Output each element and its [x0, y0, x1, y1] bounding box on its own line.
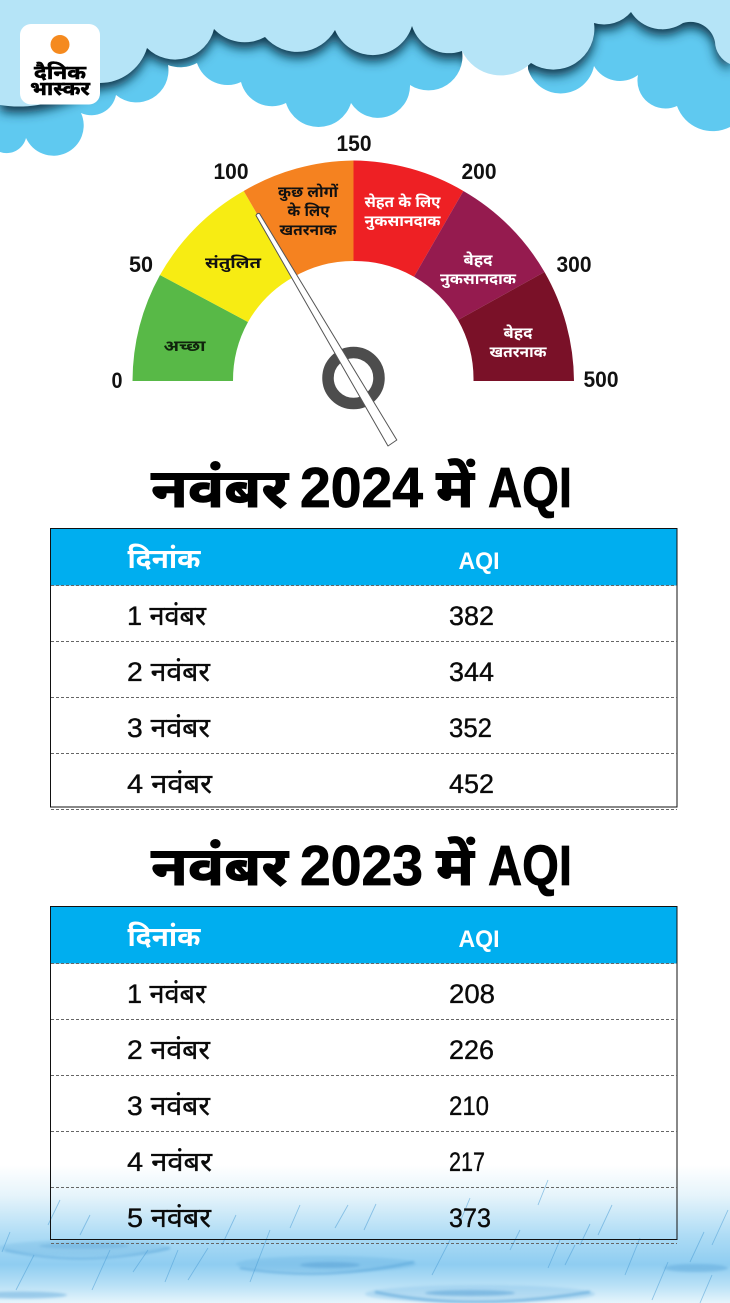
segment labels: के लिए [288, 202, 330, 220]
scale numbers: 100 [214, 159, 248, 184]
segment: orange [244, 160, 354, 277]
segment labels: खतरनाक [490, 344, 547, 361]
table header: दिनांक [128, 544, 201, 574]
scale numbers [112, 131, 618, 393]
table: November 2024 [50, 528, 677, 810]
scale numbers: 300 [556, 252, 592, 277]
row 2: 344 [449, 657, 494, 687]
row 4: 4 नवंबर [127, 1147, 213, 1177]
row 1 [127, 601, 494, 631]
heading: November 2023: 2023 [300, 834, 423, 898]
heading: November 2023 [151, 834, 572, 898]
table header: AQI [458, 548, 500, 575]
row 4: 217 [449, 1147, 485, 1177]
segment labels: अच्छा [164, 338, 206, 355]
segment labels: बेहद [464, 251, 493, 269]
segment: purple [414, 191, 544, 320]
heading: November 2023: नवंबर [151, 837, 289, 897]
logo: Dainik Bhaskar: दैनिक [34, 61, 87, 84]
cloud inner shadow [0, 6, 730, 113]
scale numbers: 200 [462, 159, 496, 184]
scale numbers: 500 [584, 367, 618, 392]
gauge chart [112, 131, 618, 446]
row 2: 2 नवंबर [127, 1035, 211, 1065]
segment labels: नुकसानदाक [440, 271, 517, 289]
background: bottom rain water gradient [0, 1165, 730, 1303]
scale numbers: 0 [112, 368, 122, 393]
clouds header [0, 0, 730, 156]
row 4 [127, 1147, 485, 1177]
row 1: 1 नवंबर [127, 601, 207, 631]
row 3: 210 [449, 1091, 489, 1121]
table header: AQI [458, 926, 500, 953]
row 4: 4 नवंबर [127, 769, 213, 799]
row 5 [127, 1203, 491, 1233]
heading: November 2024: AQI [488, 456, 572, 520]
row 4: 452 [449, 769, 494, 799]
segment labels: खतरनाक [280, 222, 337, 239]
row 3: 352 [449, 713, 492, 743]
table header [128, 922, 500, 953]
segment: maroon [458, 272, 574, 381]
row 1: 1 नवंबर [127, 979, 207, 1009]
heading: November 2024: 2024 [300, 456, 423, 520]
heading: November 2023: AQI [488, 834, 572, 898]
row 5: 373 [449, 1203, 491, 1233]
segment: green [132, 275, 248, 381]
segment labels: कुछ लोगों [278, 183, 339, 202]
hub ring [328, 352, 379, 404]
row 3 [127, 1091, 489, 1121]
row 2 [127, 1035, 494, 1065]
segment labels: नुकसानदाक [364, 213, 441, 231]
table: November 2023 [50, 906, 677, 1244]
row 2: 226 [449, 1035, 494, 1065]
needle [256, 213, 397, 446]
row 4 [127, 769, 494, 799]
scale numbers: 50 [129, 252, 153, 277]
segment: red [354, 160, 463, 277]
table header [51, 529, 676, 586]
segment labels: संतुलित [205, 255, 262, 273]
segment: yellow [160, 191, 294, 322]
heading: November 2024: नवंबर [151, 459, 289, 519]
row 1: 208 [449, 979, 495, 1009]
water ripples and rain [0, 1180, 728, 1303]
segment labels: बेहद [504, 324, 533, 342]
row 2 [127, 657, 494, 687]
logo: Dainik Bhaskar [20, 24, 100, 104]
heading: November 2024 [151, 456, 572, 520]
table header: दिनांक [128, 922, 201, 952]
scale numbers: 150 [336, 131, 372, 156]
row 3 [127, 713, 492, 743]
row 2: 2 नवंबर [127, 657, 211, 687]
segment labels [164, 183, 547, 361]
segment labels: सेहत के लिए [364, 193, 441, 211]
mid blue cloud layer [0, 0, 730, 156]
heading: November 2023: में [436, 836, 475, 897]
light blue cloud layer [0, 0, 730, 107]
row 5: 5 नवंबर [127, 1203, 212, 1233]
heading: November 2024: में [436, 458, 475, 519]
row 1: 382 [449, 601, 494, 631]
row 3: 3 नवंबर [127, 713, 211, 743]
row 1 [127, 979, 495, 1009]
logo: Dainik Bhaskar: भास्कर [30, 79, 91, 100]
row 3: 3 नवंबर [127, 1091, 211, 1121]
